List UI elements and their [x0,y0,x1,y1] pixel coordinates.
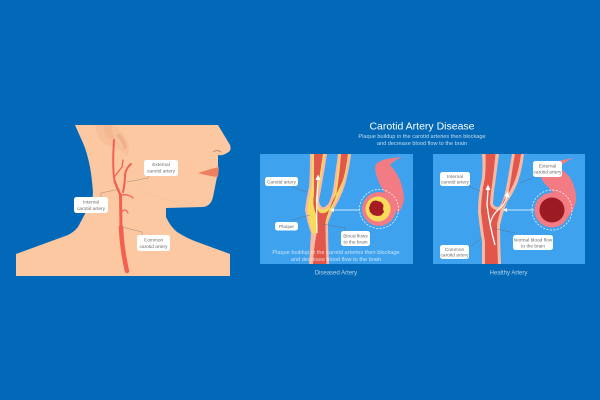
artery wall [305,154,351,264]
label: internal carotid artery [440,172,470,186]
jaw crease [138,185,180,202]
label: normal blood flow to the brain: Normal blood flow [514,237,553,243]
label: internal carotid artery: carotid artery [441,180,470,186]
leader lines [292,187,345,231]
label: blood flows to the brain [341,231,370,246]
label: common carotid artery: carotid artery [140,244,168,250]
icon: healthy cross-section [532,190,572,230]
overlay caption: and decrease blood flow to the brain [291,257,381,263]
flow arrow: cross-section pointer [330,208,360,212]
label: external carotid artery: carotid artery [147,168,176,174]
blood channel [481,154,521,264]
overlay caption [272,250,400,263]
subtitle: Plaque buildup in the carotid arteries then blockage [358,134,486,140]
blood channel [313,154,348,264]
label: common carotid artery: Common [144,238,164,244]
leader lines [468,177,535,248]
icon: diseased cross-section [360,190,398,228]
icon: ear [95,125,129,157]
label: common carotid artery: Common [445,247,465,253]
panel background [433,154,585,264]
label: external carotid artery [144,160,178,176]
label: carotid artery: Carotid artery [267,179,297,185]
label: external carotid artery [533,161,562,177]
label: external carotid artery: External [152,162,170,168]
label: common carotid artery [137,235,170,251]
label: normal blood flow to the brain [513,235,553,250]
label: normal blood flow to the brain: to the brain [521,243,545,249]
overlay caption: Plaque buildup in the carotid arteries then blockage [272,250,400,256]
panel: diseased artery [260,154,413,264]
subtitle: and decrease blood flow to the brain [377,141,467,147]
label: carotid artery [265,177,298,186]
label: internal carotid artery: Internal [447,174,463,180]
flow arrows [486,184,510,245]
label: internal carotid artery [74,197,108,213]
panel: head and neck anatomy [16,125,231,276]
lips [198,167,219,177]
label: internal carotid artery: Internal [83,200,99,206]
label: common carotid artery: carotid artery [440,253,469,259]
flow arrow: cross-section pointer [503,208,534,212]
leader lines [101,176,149,235]
label: blood flows to the brain: Blood flows [343,233,368,239]
icon: artery tube [375,157,404,213]
label: external carotid artery: carotid artery [534,170,562,176]
label: plaque: Plaque [279,224,294,230]
plaque [308,154,349,235]
label: internal carotid artery: carotid artery [77,206,106,212]
artery wall [478,154,524,264]
label: common carotid artery [440,245,469,259]
title: Carotid Artery Disease [369,120,475,132]
carotid artery tree [113,140,133,271]
panel: healthy artery [433,154,585,264]
flow arrow: upward [316,174,320,233]
icon: artery tube [540,158,576,217]
caption: healthy artery: Healthy Artery [490,270,527,276]
panel background [260,154,413,264]
head silhouette [16,125,231,276]
label: external carotid artery: External [539,164,556,170]
subtitle [358,134,486,147]
nostril [213,150,221,152]
caption: diseased artery: Diseased Artery [315,270,357,276]
label: blood flows to the brain: to the brain [343,239,368,245]
label: plaque [275,222,298,230]
